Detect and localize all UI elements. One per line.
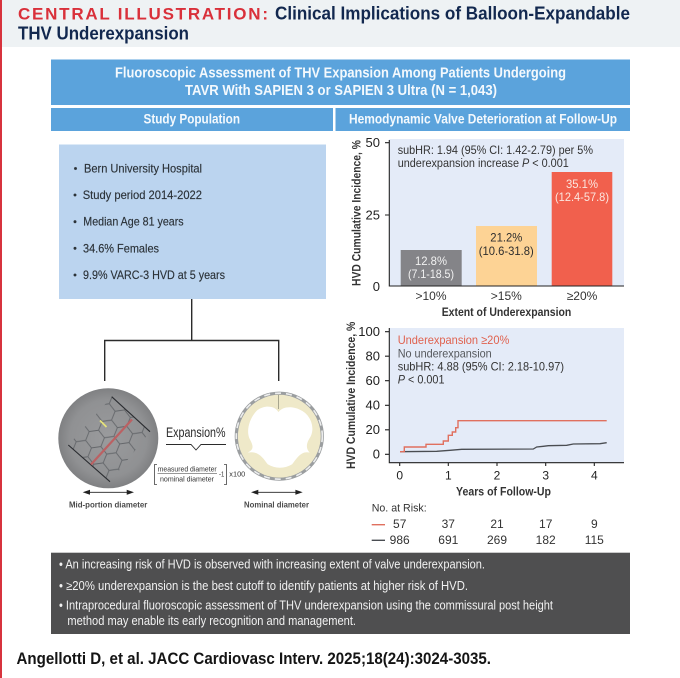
line chart: cumulative incidence over follow-up: HVD Cumulative Incidence, % [344, 321, 358, 469]
table: number at risk: 17 [539, 517, 553, 531]
bar: at least 20 percent [552, 172, 612, 286]
table: number at risk: 269 [487, 533, 507, 547]
bar chart: HVD by extent of underexpansion: underexpansion increase P < 0.001 [398, 158, 569, 170]
curve: underexpansion at least 20 percent [400, 421, 607, 452]
bar chart: HVD by extent of underexpansion: HVD Cumulative Incidence, % [350, 140, 364, 286]
chart annotation: No underexpansion [398, 346, 492, 360]
chart annotation: Underexpansion ≥20% [398, 333, 510, 347]
label: expansion percent formula: measured diameter [158, 464, 217, 474]
title band: THV Underexpansion [18, 24, 189, 44]
line chart: cumulative incidence over follow-up: 60 [366, 373, 380, 388]
table: number at risk: 182 [536, 533, 556, 547]
bar chart: HVD by extent of underexpansion: >15% [491, 289, 522, 303]
heading: study population: Study Population [144, 110, 240, 126]
panel: study population list: 9.9% VARC-3 HVD at 5 years [83, 268, 225, 282]
bar: greater than 10 percent: 12.8% [415, 254, 447, 268]
title band: Clinical Implications of Balloon-Expandable [275, 4, 630, 24]
citation: Angellotti D, et al. JACC Cardiovasc Interv. 2025;18(24):3024-3035. [16, 649, 491, 668]
bar: greater than 10 percent: (7.1-18.5) [408, 267, 454, 281]
panel: study population list [59, 144, 326, 299]
label: expansion percent formula: x100 [229, 472, 245, 478]
panel: study population list: Median Age 81 years [83, 215, 184, 229]
arrow: mid-portion diameter [69, 490, 148, 509]
bar chart: HVD by extent of underexpansion: >10% [415, 289, 447, 303]
icon: valve photograph, top view [236, 393, 322, 479]
panel: study population list: Bern University Hospital [84, 161, 202, 175]
bar: greater than 15 percent: (10.6-31.8) [479, 244, 534, 258]
bar: at least 20 percent: 35.1% [566, 177, 598, 191]
table: number at risk: 986 [390, 533, 410, 547]
table: number at risk: 21 [490, 517, 504, 531]
table: number at risk: No. at Risk: [372, 503, 427, 515]
line chart: cumulative incidence over follow-up: 20 [366, 422, 380, 437]
line chart: cumulative incidence over follow-up: 2 [494, 468, 501, 482]
heading: study overview banner: TAVR With SAPIEN 3 or SAPIEN 3 Ultra (N = 1,043) [185, 83, 497, 99]
heading: study overview banner: Fluoroscopic Assessment of THV Expansion Among Patients Undergoing [115, 66, 566, 82]
label: expansion percent formula: Expansion% [166, 424, 226, 440]
bar: greater than 10 percent [401, 250, 462, 286]
bar chart: HVD by extent of underexpansion: ≥20% [567, 289, 598, 303]
table: number at risk: 691 [438, 533, 459, 547]
title band [0, 0, 680, 47]
heading: hemodynamic valve deterioration [336, 108, 630, 131]
bar chart: HVD by extent of underexpansion: 50 [366, 135, 380, 150]
bar chart: HVD by extent of underexpansion: subHR: 1.94 (95% CI: 1.42-2.79) per 5% [398, 143, 593, 157]
table: number at risk: 57 [393, 517, 407, 531]
panel: key takeaways: method may enable its early recognition and management. [67, 614, 356, 628]
label: expansion percent formula: -1 [219, 472, 224, 478]
bar chart: HVD by extent of underexpansion: 25 [366, 208, 380, 222]
table: number at risk: 115 [585, 533, 604, 547]
bar: greater than 15 percent [476, 226, 537, 286]
bar: at least 20 percent: (12.4-57.8) [555, 190, 609, 204]
table: number at risk [372, 503, 604, 547]
connector from population box to images [105, 299, 279, 381]
line chart: cumulative incidence over follow-up: 40 [366, 398, 380, 412]
line chart: cumulative incidence over follow-up [344, 321, 624, 499]
chart annotation: P < 0.001 [398, 374, 444, 386]
line chart: cumulative incidence over follow-up: 1 [445, 468, 452, 482]
chart annotation: subHR: 4.88 (95% CI: 2.18-10.97) [398, 360, 564, 374]
line chart: cumulative incidence over follow-up: Years of Follow-Up [456, 485, 551, 499]
table: number at risk: 37 [442, 517, 455, 531]
title band: CENTRAL ILLUSTRATION: [18, 4, 268, 24]
bar chart: HVD by extent of underexpansion: Extent of Underexpansion [442, 305, 571, 319]
label: expansion percent formula [154, 424, 245, 484]
bar chart: HVD by extent of underexpansion [350, 135, 624, 319]
line chart: cumulative incidence over follow-up: 0 [396, 468, 403, 482]
bar: greater than 15 percent: 21.2% [490, 231, 523, 245]
line chart: cumulative incidence over follow-up: 100 [358, 324, 380, 339]
label: expansion percent formula: nominal diameter [160, 474, 214, 484]
curve: no underexpansion [400, 443, 607, 452]
heading: study population [51, 108, 333, 131]
bar chart: HVD by extent of underexpansion: 0 [373, 279, 380, 294]
panel: key takeaways [51, 553, 630, 634]
chart annotation [398, 333, 564, 386]
panel: key takeaways: • Intraprocedural fluoroscopic assessment of THV underexpansion using the commissural post height [59, 598, 553, 612]
line chart: cumulative incidence over follow-up: 0 [373, 446, 380, 462]
arrow: nominal diameter: Nominal diameter [244, 499, 310, 509]
heading: hemodynamic valve deterioration: Hemodynamic Valve Deterioration at Follow-Up [349, 110, 617, 126]
panel: study population list: Study period 2014-2022 [83, 188, 202, 202]
panel: key takeaways: • An increasing risk of HVD is observed with increasing extent of valve underexpansion. [59, 558, 485, 572]
line chart: cumulative incidence over follow-up: 3 [542, 468, 549, 482]
icon: fluoroscopic image of valve frame [58, 388, 158, 488]
line chart: cumulative incidence over follow-up: 80 [366, 348, 380, 364]
arrow: mid-portion diameter: Mid-portion diameter [69, 499, 148, 509]
panel: study population list: 34.6% Females [83, 241, 159, 255]
panel: key takeaways: • ≥20% underexpansion is the best cutoff to identify patients at higher risk of HVD. [59, 579, 468, 593]
heading: study overview banner [51, 60, 630, 105]
line chart: cumulative incidence over follow-up: 4 [591, 468, 598, 482]
table: number at risk: 9 [591, 517, 598, 531]
arrow: nominal diameter [244, 490, 310, 509]
